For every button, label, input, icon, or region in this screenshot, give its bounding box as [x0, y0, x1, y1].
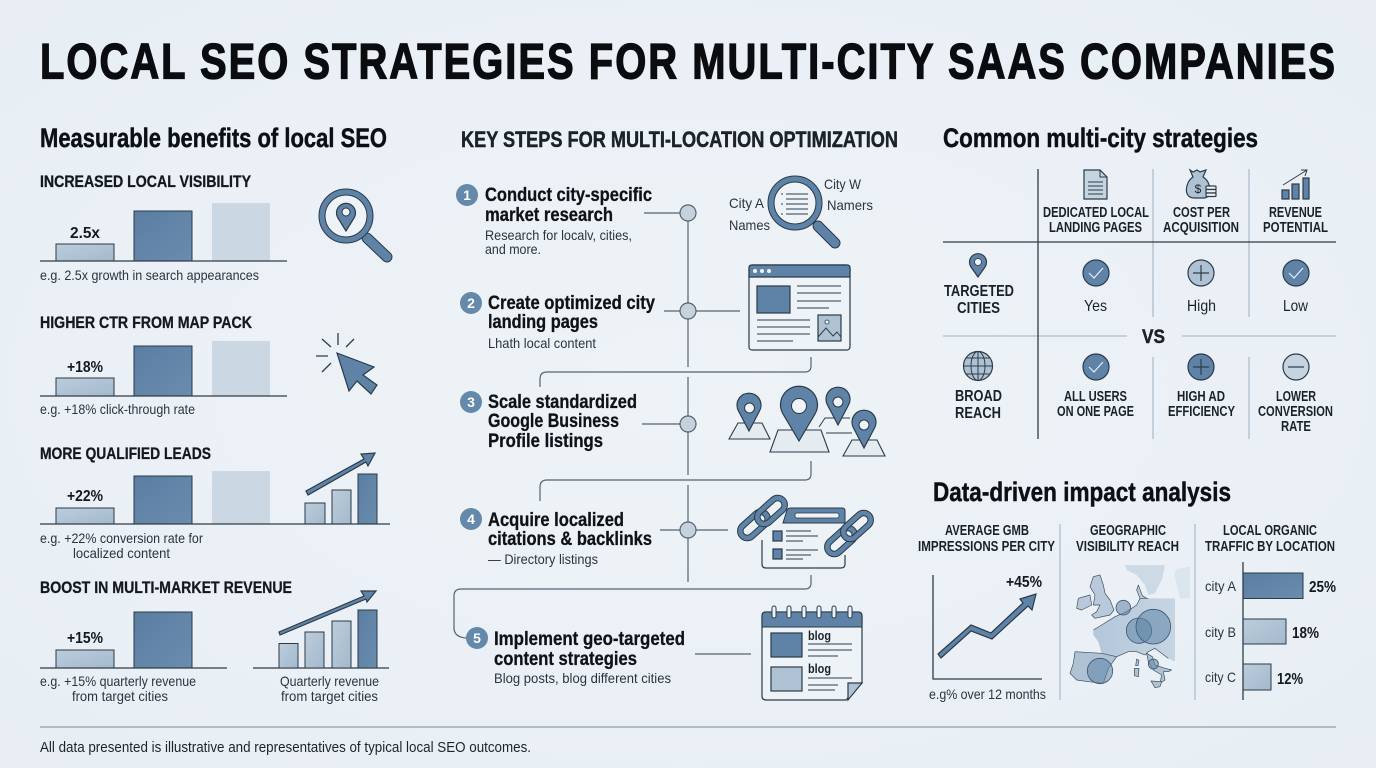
map: geographic visibility reach: VISIBILITY REACH — [1076, 539, 1179, 555]
step 5: Implement geo-targeted — [494, 628, 685, 650]
step 5: 5 — [473, 630, 481, 646]
step 2: Create optimized city — [488, 292, 655, 314]
table header: dedicated local landing pages: DEDICATED LOCAL — [1043, 205, 1149, 221]
table header: cost per acquisition — [1163, 170, 1239, 236]
step 1: Conduct city-specific — [485, 184, 652, 206]
step 4: — Directory listings — [488, 551, 598, 567]
step 3: Profile listings — [488, 430, 603, 452]
benefit: boost in multi-market revenue: from target cities — [281, 688, 378, 704]
line chart: average GMB impressions — [918, 523, 1055, 702]
column separators — [1060, 524, 1195, 700]
benefit: increased local visibility: 2.5x — [70, 225, 100, 242]
step 4 — [460, 508, 652, 567]
benefit: higher CTR from map pack: e.g. +18% click-through rate — [40, 401, 195, 417]
benefit: more qualified leads: MORE QUALIFIED LEADS — [40, 444, 211, 463]
line chart: average GMB impressions: AVERAGE GMB — [945, 523, 1029, 539]
bar chart: local organic traffic: city B — [1205, 624, 1236, 640]
benefit: boost in multi-market revenue: e.g. +15% quarterly revenue — [40, 673, 196, 689]
step 2 — [460, 292, 655, 351]
comparison table grid — [943, 169, 1336, 439]
step 4: citations & backlinks — [488, 528, 652, 550]
heading: benefits: Measurable benefits of local SEO — [40, 123, 387, 153]
row: targeted cities: Low — [1283, 298, 1308, 315]
step 3: 3 — [467, 394, 475, 410]
benefit: more qualified leads: e.g. +22% conversion rate for — [40, 530, 203, 546]
step 4: 4 — [467, 511, 475, 527]
row: broad reach: BROAD — [955, 388, 1002, 405]
step 5 — [466, 627, 685, 686]
bar chart: local organic traffic: 12% — [1277, 671, 1303, 688]
map: geographic visibility reach — [1070, 523, 1190, 688]
bar chart: local organic traffic — [1205, 523, 1336, 700]
table header: revenue potential: REVENUE — [1269, 205, 1322, 221]
table header: cost per acquisition: ACQUISITION — [1163, 220, 1239, 236]
bar chart: local organic traffic: TRAFFIC BY LOCATION — [1205, 539, 1335, 555]
row: targeted cities: CITIES — [957, 300, 1000, 317]
benefit: increased local visibility: e.g. 2.5x growth in search appearances — [40, 267, 259, 283]
row: broad reach: EFFICIENCY — [1168, 404, 1235, 420]
icon: market research magnifier: Names — [729, 217, 770, 233]
row: broad reach: RATE — [1281, 419, 1311, 435]
panel: data-driven impact analysis — [918, 477, 1336, 702]
benefit: higher CTR from map pack: +18% — [67, 359, 103, 376]
icon: browser landing page — [749, 265, 850, 350]
step 5: Blog posts, blog different cities — [494, 670, 671, 686]
icon: market research magnifier: City W — [824, 176, 862, 192]
icon: blog calendar: blog — [808, 661, 831, 676]
icon: market research magnifier: City A — [729, 195, 765, 211]
icon: blog calendar: blog — [808, 628, 831, 643]
icon: map pins on listings — [729, 386, 885, 456]
icon: market research magnifier — [729, 176, 873, 243]
vs divider label: VS — [1142, 327, 1165, 348]
row: targeted cities — [944, 254, 1309, 317]
step 1: Research for localv, cities, — [485, 227, 632, 243]
step 3: Scale standardized — [488, 391, 637, 413]
step 1: market research — [485, 204, 613, 226]
map: geographic visibility reach: GEOGRAPHIC — [1090, 523, 1166, 539]
line chart: average GMB impressions: e.g% over 12 months — [929, 686, 1046, 702]
heading: key steps: KEY STEPS FOR MULTI-LOCATION OPTIMIZATION — [461, 127, 898, 152]
table header: cost per acquisition: $ — [1195, 182, 1202, 196]
benefit: more qualified leads: +22% — [67, 488, 103, 505]
bar chart: local organic traffic: 25% — [1309, 579, 1336, 596]
benefit: boost in multi-market revenue: BOOST IN MULTI-MARKET REVENUE — [40, 578, 292, 597]
table header: dedicated local landing pages — [1043, 170, 1149, 236]
benefit: more qualified leads: localized content — [73, 545, 170, 561]
row: broad reach: ON ONE PAGE — [1057, 404, 1134, 420]
icon: blog calendar — [762, 606, 862, 700]
row: broad reach: LOWER — [1276, 389, 1316, 405]
heading: strategies: Common multi-city strategies — [943, 123, 1258, 153]
benefit: boost in multi-market revenue: from target cities — [72, 688, 168, 704]
panel: measurable benefits — [40, 123, 390, 704]
icon: market research magnifier: Namers — [827, 197, 873, 213]
bar chart: local organic traffic: LOCAL ORGANIC — [1223, 523, 1317, 539]
step 3 — [460, 391, 637, 452]
table header: revenue potential — [1263, 170, 1328, 236]
row: broad reach: ALL USERS — [1064, 389, 1127, 405]
benefit: increased local visibility — [40, 172, 287, 283]
step 2: landing pages — [488, 311, 598, 333]
benefit: higher CTR from map pack: HIGHER CTR FROM MAP PACK — [40, 313, 253, 332]
icon: chain links and citation document — [737, 495, 874, 568]
benefit: more qualified leads — [40, 444, 390, 561]
row: broad reach — [955, 352, 1333, 435]
benefit: increased local visibility: INCREASED LOCAL VISIBILITY — [40, 172, 252, 191]
step 1: 1 — [463, 187, 471, 203]
benefit: boost in multi-market revenue — [40, 578, 389, 704]
step 4: Acquire localized — [488, 509, 624, 531]
row: broad reach: HIGH AD — [1177, 389, 1225, 405]
row: targeted cities: Yes — [1084, 298, 1107, 315]
row: targeted cities: High — [1187, 298, 1216, 315]
table header: cost per acquisition: COST PER — [1173, 205, 1230, 221]
timeline connectors — [454, 205, 811, 654]
heading: impact analysis: Data-driven impact analysis — [933, 477, 1231, 507]
table header: revenue potential: POTENTIAL — [1263, 220, 1328, 236]
step 1: and more. — [485, 241, 541, 257]
line chart: average GMB impressions: IMPRESSIONS PER CITY — [918, 539, 1055, 555]
benefit: higher CTR from map pack — [40, 313, 287, 417]
icon: cursor click — [316, 333, 377, 394]
step 2: Lhath local content — [488, 335, 596, 351]
step 2: 2 — [467, 295, 475, 311]
bar chart: local organic traffic: 18% — [1292, 625, 1319, 642]
icon: magnifier with location pin — [319, 189, 387, 257]
table header: dedicated local landing pages: LANDING PAGES — [1049, 220, 1142, 236]
row: targeted cities: TARGETED — [944, 283, 1014, 300]
step 5: content strategies — [494, 648, 637, 670]
step 1 — [456, 184, 652, 257]
bar chart: local organic traffic: city A — [1205, 578, 1237, 594]
row: broad reach: REACH — [955, 405, 1001, 422]
benefit: boost in multi-market revenue: +15% — [67, 630, 103, 647]
bar chart: local organic traffic: city C — [1205, 669, 1236, 685]
row: broad reach: CONVERSION — [1258, 404, 1333, 420]
benefit: boost in multi-market revenue: Quarterly revenue — [280, 673, 379, 689]
panel: key steps — [454, 127, 898, 700]
panel: common multi-city strategies — [943, 123, 1336, 439]
line chart: average GMB impressions: +45% — [1006, 574, 1042, 591]
step 3: Google Business — [488, 410, 619, 432]
footer note: All data presented is illustrative and representatives of typical local SEO outcomes. — [40, 739, 531, 756]
